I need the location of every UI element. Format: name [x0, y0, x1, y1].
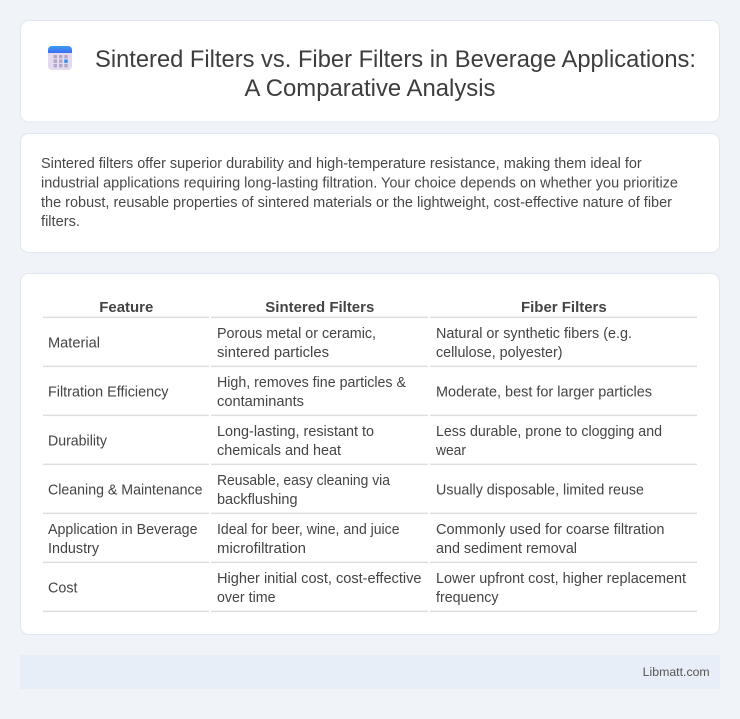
table row: cleaning and maintenance: Cleaning & Maintenance — [48, 483, 203, 499]
title: A Comparative Analysis — [244, 75, 496, 102]
table row: filtration efficiency: contaminants — [217, 394, 304, 410]
table row: durability: chemicals and heat — [217, 443, 341, 459]
text block: summary — [41, 156, 678, 230]
panel: summary paragraph — [20, 134, 720, 252]
footer — [20, 655, 720, 689]
table header row: Feature — [99, 299, 153, 316]
panel: comparison table — [20, 274, 720, 634]
title: Sintered Filters vs. Fiber Filters in Beverage Applications: — [95, 46, 696, 73]
table row: application in beverage industry: Application in Beverage — [48, 522, 198, 538]
text block: summary: Sintered filters offer superior durability and high-temperature resistance, making them ideal for — [41, 156, 642, 172]
table row: cost: frequency — [436, 590, 499, 606]
footer: Libmatt.com — [643, 665, 710, 679]
table row: material: Material — [48, 336, 100, 352]
table row: application in beverage industry: microfiltration — [217, 541, 306, 557]
table row: filtration efficiency: High, removes fine particles & — [217, 375, 406, 391]
table row: filtration efficiency: Moderate, best for larger particles — [436, 385, 652, 401]
title — [95, 46, 696, 102]
table row: durability — [48, 424, 662, 459]
table row: material: cellulose, polyester) — [436, 345, 562, 361]
table row: filtration efficiency — [48, 375, 652, 410]
table row: durability: Durability — [48, 434, 108, 450]
text block: summary: industrial applications requiring long-lasting filtration. Your choice depends on whether you prioritize — [41, 176, 678, 192]
table row: application in beverage industry: Industry — [48, 541, 100, 557]
table row: durability: Less durable, prone to clogging and — [436, 424, 662, 440]
text block: summary: filters. — [41, 214, 80, 230]
table header row: Sintered Filters — [265, 299, 374, 316]
table header row: Fiber Filters — [521, 299, 607, 316]
table row: material: Porous metal or ceramic, — [217, 326, 376, 342]
table row: durability: wear — [435, 443, 466, 459]
table row: filtration efficiency: Filtration Efficiency — [48, 385, 169, 401]
table row: cleaning and maintenance: Usually disposable, limited reuse — [436, 483, 644, 499]
table row: material: sintered particles — [217, 345, 329, 361]
icon: calendar — [48, 46, 72, 70]
table row: cost: Lower upfront cost, higher replacement — [436, 571, 686, 587]
panel: header — [20, 20, 720, 122]
text block: summary: the robust, reusable properties of sintered materials or the lightweight, cost-effective nature of fiber — [41, 195, 672, 211]
table row: application in beverage industry: and sediment removal — [436, 541, 577, 557]
table row: cleaning and maintenance: backflushing — [217, 492, 298, 508]
table row: material: Natural or synthetic fibers (e.g. — [436, 326, 632, 342]
table row: material — [48, 326, 632, 361]
table header row — [99, 299, 607, 316]
table row: application in beverage industry: Ideal for beer, wine, and juice — [217, 522, 400, 538]
table row: cost — [48, 571, 686, 606]
table row: cost: over time — [217, 590, 276, 606]
table row: application in beverage industry: Commonly used for coarse filtration — [436, 522, 665, 538]
table row: application in beverage industry — [48, 522, 665, 557]
table row: cleaning and maintenance: Reusable, easy cleaning via — [217, 473, 390, 489]
table row: cost: Higher initial cost, cost-effective — [217, 571, 422, 587]
table row: cleaning and maintenance — [48, 473, 644, 508]
table row: durability: Long-lasting, resistant to — [217, 424, 374, 440]
table row: cost: Cost — [48, 581, 78, 597]
